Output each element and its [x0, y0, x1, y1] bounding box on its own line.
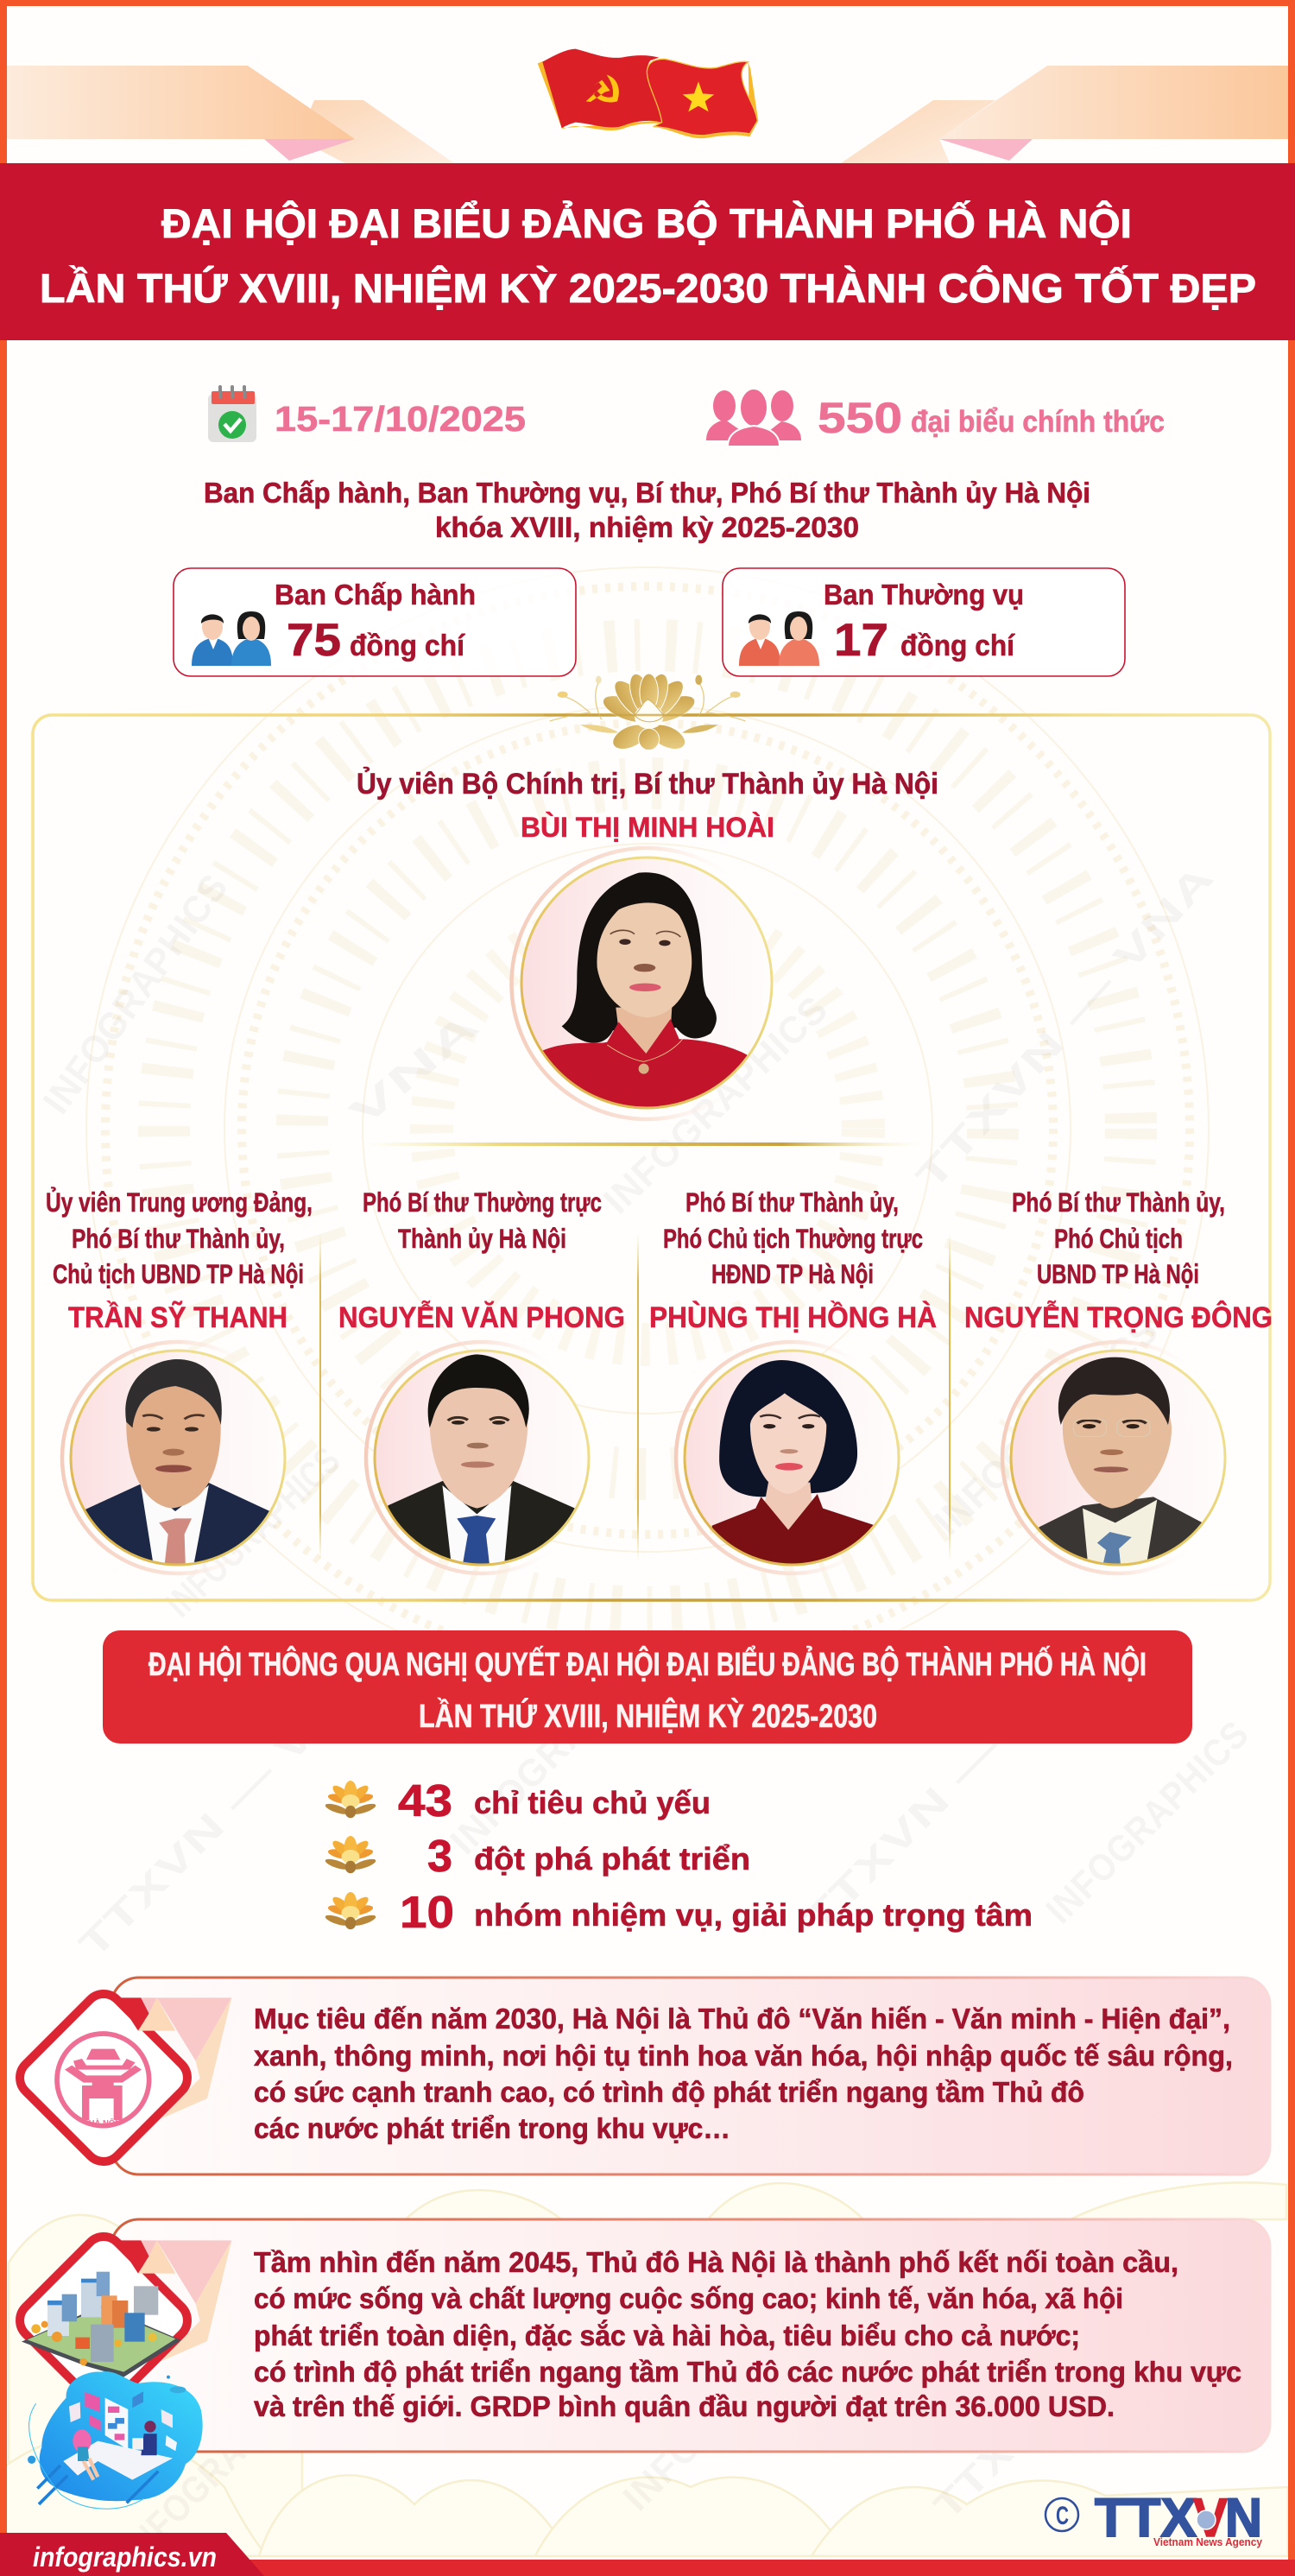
list: 10 task groups: 10	[400, 1888, 454, 1938]
watermarks: INFOGRAPHICS	[926, 1309, 1167, 1543]
title: ĐẠI HỘI ĐẠI BIỂU ĐẢNG BỘ THÀNH PHỐ HÀ NỘI	[161, 200, 1132, 246]
vision text	[254, 2246, 1241, 2422]
watermarks: INFOGRAPHICS	[1038, 1712, 1257, 1932]
footer tab: infographics.vn	[33, 2541, 217, 2573]
event date: 15-17/10/2025	[275, 399, 526, 439]
icon: calendar	[208, 385, 256, 442]
title	[40, 200, 1256, 311]
leader 2 name: NGUYỄN VĂN PHONG	[338, 1301, 625, 1334]
watermarks: INFOGRAPHICS	[615, 2282, 852, 2519]
watermarks: INFOGRAPHICS	[442, 1625, 679, 1863]
logo: copyright: C	[1056, 2502, 1069, 2530]
panel: Ban Thường vụ: Ban Thường vụ	[824, 579, 1024, 611]
icon: city and digital illustration	[12, 2229, 231, 2509]
panel: Ban Thường vụ: đồng chí	[900, 630, 1015, 662]
vision text: có mức sống và chất lượng cuộc sống cao; kinh tế, văn hóa, xã hội	[254, 2282, 1123, 2314]
logo: TTXVN Vietnam News Agency: V	[1193, 2488, 1228, 2548]
portrait: Trần Sỹ Thanh	[62, 1342, 294, 1573]
watermarks: INFOGRAPHICS	[114, 2358, 327, 2571]
title band	[0, 163, 1295, 340]
subheading	[204, 477, 1090, 543]
goal text: các nước phát triển trong khu vực…	[254, 2112, 730, 2144]
secretary title: Ủy viên Bộ Chính trị, Bí thư Thành ủy Hà Nội	[357, 768, 938, 801]
delegates count: 550	[818, 394, 902, 442]
leader 1 titles: Phó Bí thư Thành ủy,	[72, 1223, 285, 1254]
watermarks: TTXVN — VNA	[796, 1630, 1107, 1940]
leader 4 titles	[1012, 1187, 1225, 1289]
list: 3 breakthroughs: đột phá phát triển	[474, 1841, 750, 1877]
leader 3 titles	[663, 1187, 923, 1289]
list: 3 breakthroughs	[324, 1832, 750, 1882]
leader 4 titles: UBND TP Hà Nội	[1037, 1258, 1199, 1289]
leader 1 titles: Ủy viên Trung ương Đảng,	[46, 1187, 313, 1218]
vision text: có trình độ phát triển ngang tầm Thủ đô các nước phát triển trong khu vực	[254, 2356, 1241, 2388]
leader 3 titles: Phó Chủ tịch Thường trực	[663, 1223, 923, 1254]
list: 43 key targets: 43	[398, 1776, 452, 1826]
watermarks: TTXVN — VNA	[71, 1655, 382, 1966]
icon: gold lotus ornament	[544, 671, 751, 754]
column dividers	[319, 1233, 951, 1561]
list: 43 key targets	[324, 1776, 711, 1826]
vision text: Tầm nhìn đến năm 2045, Thủ đô Hà Nội là thành phố kết nối toàn cầu,	[254, 2246, 1178, 2278]
panel: Ban Chấp hành: đồng chí	[350, 630, 465, 662]
leader 4 titles: Phó Chủ tịch	[1054, 1223, 1183, 1254]
panel: Ban Chấp hành: Ban Chấp hành	[275, 579, 476, 611]
logo: TTXVN Vietnam News Agency: N	[1225, 2488, 1262, 2548]
leader 1 name: TRẦN SỸ THANH	[68, 1301, 287, 1334]
panel: Ban Thường vụ	[723, 568, 1125, 676]
watermarks: TTXVN — VNA	[925, 2254, 1200, 2528]
leader 2 titles: Phó Bí thư Thường trực	[363, 1187, 602, 1218]
icon: Hanoi emblem diamond	[12, 1986, 231, 2169]
leader 4 titles: Phó Bí thư Thành ủy,	[1012, 1187, 1225, 1218]
logo: copyright	[1045, 2498, 1078, 2531]
list: 3 breakthroughs: 3	[427, 1832, 452, 1882]
leadership frame	[33, 715, 1270, 1600]
secretary name: BÙI THỊ MINH HOÀI	[521, 812, 774, 843]
list: 10 task groups: nhóm nhiệm vụ, giải pháp trọng tâm	[474, 1897, 1033, 1933]
bronze drum mandala background	[86, 567, 1209, 1690]
title: LẦN THỨ XVIII, NHIỆM KỲ 2025-2030 THÀNH CÔNG TỐT ĐẸP	[40, 265, 1256, 311]
footer bar	[0, 2560, 1295, 2576]
leader 3 titles: HĐND TP Hà Nội	[711, 1258, 874, 1289]
watermarks: INFOGRAPHICS	[35, 866, 237, 1122]
icon: red officials	[739, 611, 819, 666]
icon: party and national flags	[538, 49, 758, 138]
watermarks: VNA	[342, 1003, 488, 1136]
watermarks: INFOGRAPHICS	[158, 1439, 349, 1625]
panel: Ban Chấp hành	[174, 568, 576, 676]
leader 2 titles: Thành ủy Hà Nội	[398, 1223, 566, 1254]
list: 10 task groups	[324, 1888, 1033, 1938]
logo: TTXVN Vietnam News Agency	[1095, 2488, 1262, 2548]
leader 3 name: PHÙNG THỊ HỒNG HÀ	[649, 1301, 937, 1334]
leader 2 titles	[363, 1187, 602, 1254]
goal text: xanh, thông minh, nơi hội tụ tinh hoa văn hóa, hội nhập quốc tế sâu rộng,	[254, 2040, 1233, 2072]
vision text: và trên thế giới. GRDP bình quân đầu người đạt trên 36.000 USD.	[254, 2390, 1115, 2422]
gold divider	[363, 1142, 921, 1146]
goal text: có sức cạnh tranh cao, có trình độ phát triển ngang tầm Thủ đô	[254, 2076, 1084, 2108]
goal text: Mục tiêu đến năm 2030, Hà Nội là Thủ đô “Văn hiến - Văn minh - Hiện đại”,	[254, 2003, 1230, 2035]
subheading: khóa XVIII, nhiệm kỳ 2025-2030	[435, 511, 859, 543]
panel: 2045 vision	[111, 2219, 1270, 2452]
subheading: Ban Chấp hành, Ban Thường vụ, Bí thư, Phó Bí thư Thành ủy Hà Nội	[204, 477, 1090, 509]
watermarks: TTXVN — VNA	[908, 856, 1222, 1199]
leader 3 titles: Phó Bí thư Thành ủy,	[685, 1187, 899, 1218]
portrait: Nguyễn Văn Phong	[366, 1342, 597, 1573]
list: 43 key targets: chỉ tiêu chủ yếu	[474, 1785, 711, 1820]
panel: Ban Thường vụ: 17	[834, 615, 888, 666]
background lotus outlines	[0, 2182, 1288, 2556]
panel: 2030 goal	[111, 1978, 1270, 2174]
watermarks	[35, 856, 1257, 2571]
footer tab	[0, 2533, 264, 2576]
delegates count	[818, 394, 1165, 442]
resolution banner: LẦN THỨ XVIII, NHIỆM KỲ 2025-2030	[419, 1697, 877, 1735]
panel: Ban Chấp hành: 75	[287, 615, 341, 666]
icon: Hanoi emblem diamond: HÀ NỘI	[89, 2118, 117, 2128]
logo: TTXVN Vietnam News Agency: Vietnam News Agency	[1153, 2536, 1262, 2548]
header ribbons	[7, 66, 1288, 163]
vision text: phát triển toàn diện, đặc sắc và hài hòa, tiêu biểu cho cả nước;	[254, 2320, 1080, 2351]
goal text	[254, 2003, 1233, 2144]
icon: blue officials	[192, 611, 271, 666]
leader 1 titles	[46, 1187, 313, 1289]
logo: TTXVN Vietnam News Agency: TTX	[1095, 2488, 1197, 2548]
resolution banner	[103, 1630, 1192, 1744]
icon: delegates	[706, 389, 801, 446]
portrait: Phùng Thị Hồng Hà	[676, 1342, 907, 1573]
portrait: Bùi Thị Minh Hoài	[511, 848, 782, 1120]
leader 1 titles: Chủ tịch UBND TP Hà Nội	[53, 1258, 304, 1289]
watermarks: INFOGRAPHICS	[596, 988, 837, 1222]
leader 4 name: NGUYỄN TRỌNG ĐÔNG	[964, 1301, 1273, 1334]
portrait: Nguyễn Trọng Đông	[1002, 1342, 1234, 1573]
delegates count: đại biểu chính thức	[911, 405, 1165, 439]
